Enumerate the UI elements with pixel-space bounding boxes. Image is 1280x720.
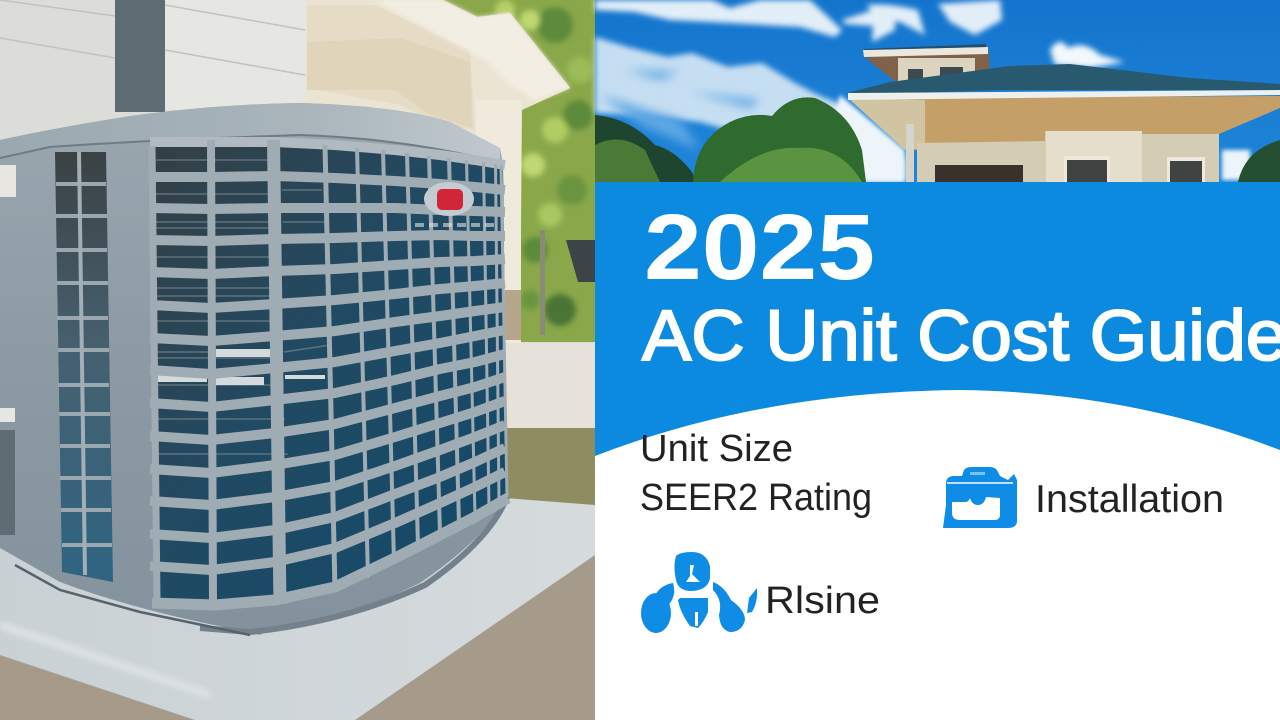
label: Rlsine: Rlsine (765, 580, 880, 622)
label: Unit Size: Unit Size (640, 428, 793, 470)
house siding background (0, 0, 595, 720)
grille horizontal bars (150, 142, 508, 605)
front grille (150, 140, 508, 605)
mailbox (566, 240, 595, 282)
icon: technician figure (641, 552, 757, 633)
main roof (847, 64, 1280, 95)
grille vertical bars (152, 140, 507, 604)
fascia (848, 90, 1280, 100)
left louver panel (55, 152, 113, 582)
label: SEER2 Rating: SEER2 Rating (640, 477, 872, 519)
trees (595, 97, 1280, 182)
ground (0, 343, 595, 720)
title: 2025: 2025 (644, 195, 875, 299)
tree foliage (443, 0, 595, 342)
panel: house photo with sky (595, 0, 1280, 182)
grille openings (154, 145, 507, 600)
doors and windows (935, 165, 1023, 182)
house (847, 44, 1280, 182)
icon: toolbox (943, 467, 1017, 528)
label: Installation: Installation (1035, 478, 1224, 521)
AC unit housing (0, 103, 507, 635)
porch and column (305, 0, 570, 345)
panel: blue title band (595, 182, 1280, 456)
sky (595, 0, 1280, 182)
chimney pipe (115, 0, 165, 112)
title: AC Unit Cost Guide: AC Unit Cost Guide (642, 297, 1280, 376)
upper storey (863, 46, 990, 82)
walls (917, 131, 1219, 182)
brand badge (415, 182, 495, 225)
clouds (595, 0, 1250, 182)
slat streaks (156, 160, 330, 454)
panel: AC unit photo (0, 0, 595, 720)
soffit (848, 96, 1280, 160)
